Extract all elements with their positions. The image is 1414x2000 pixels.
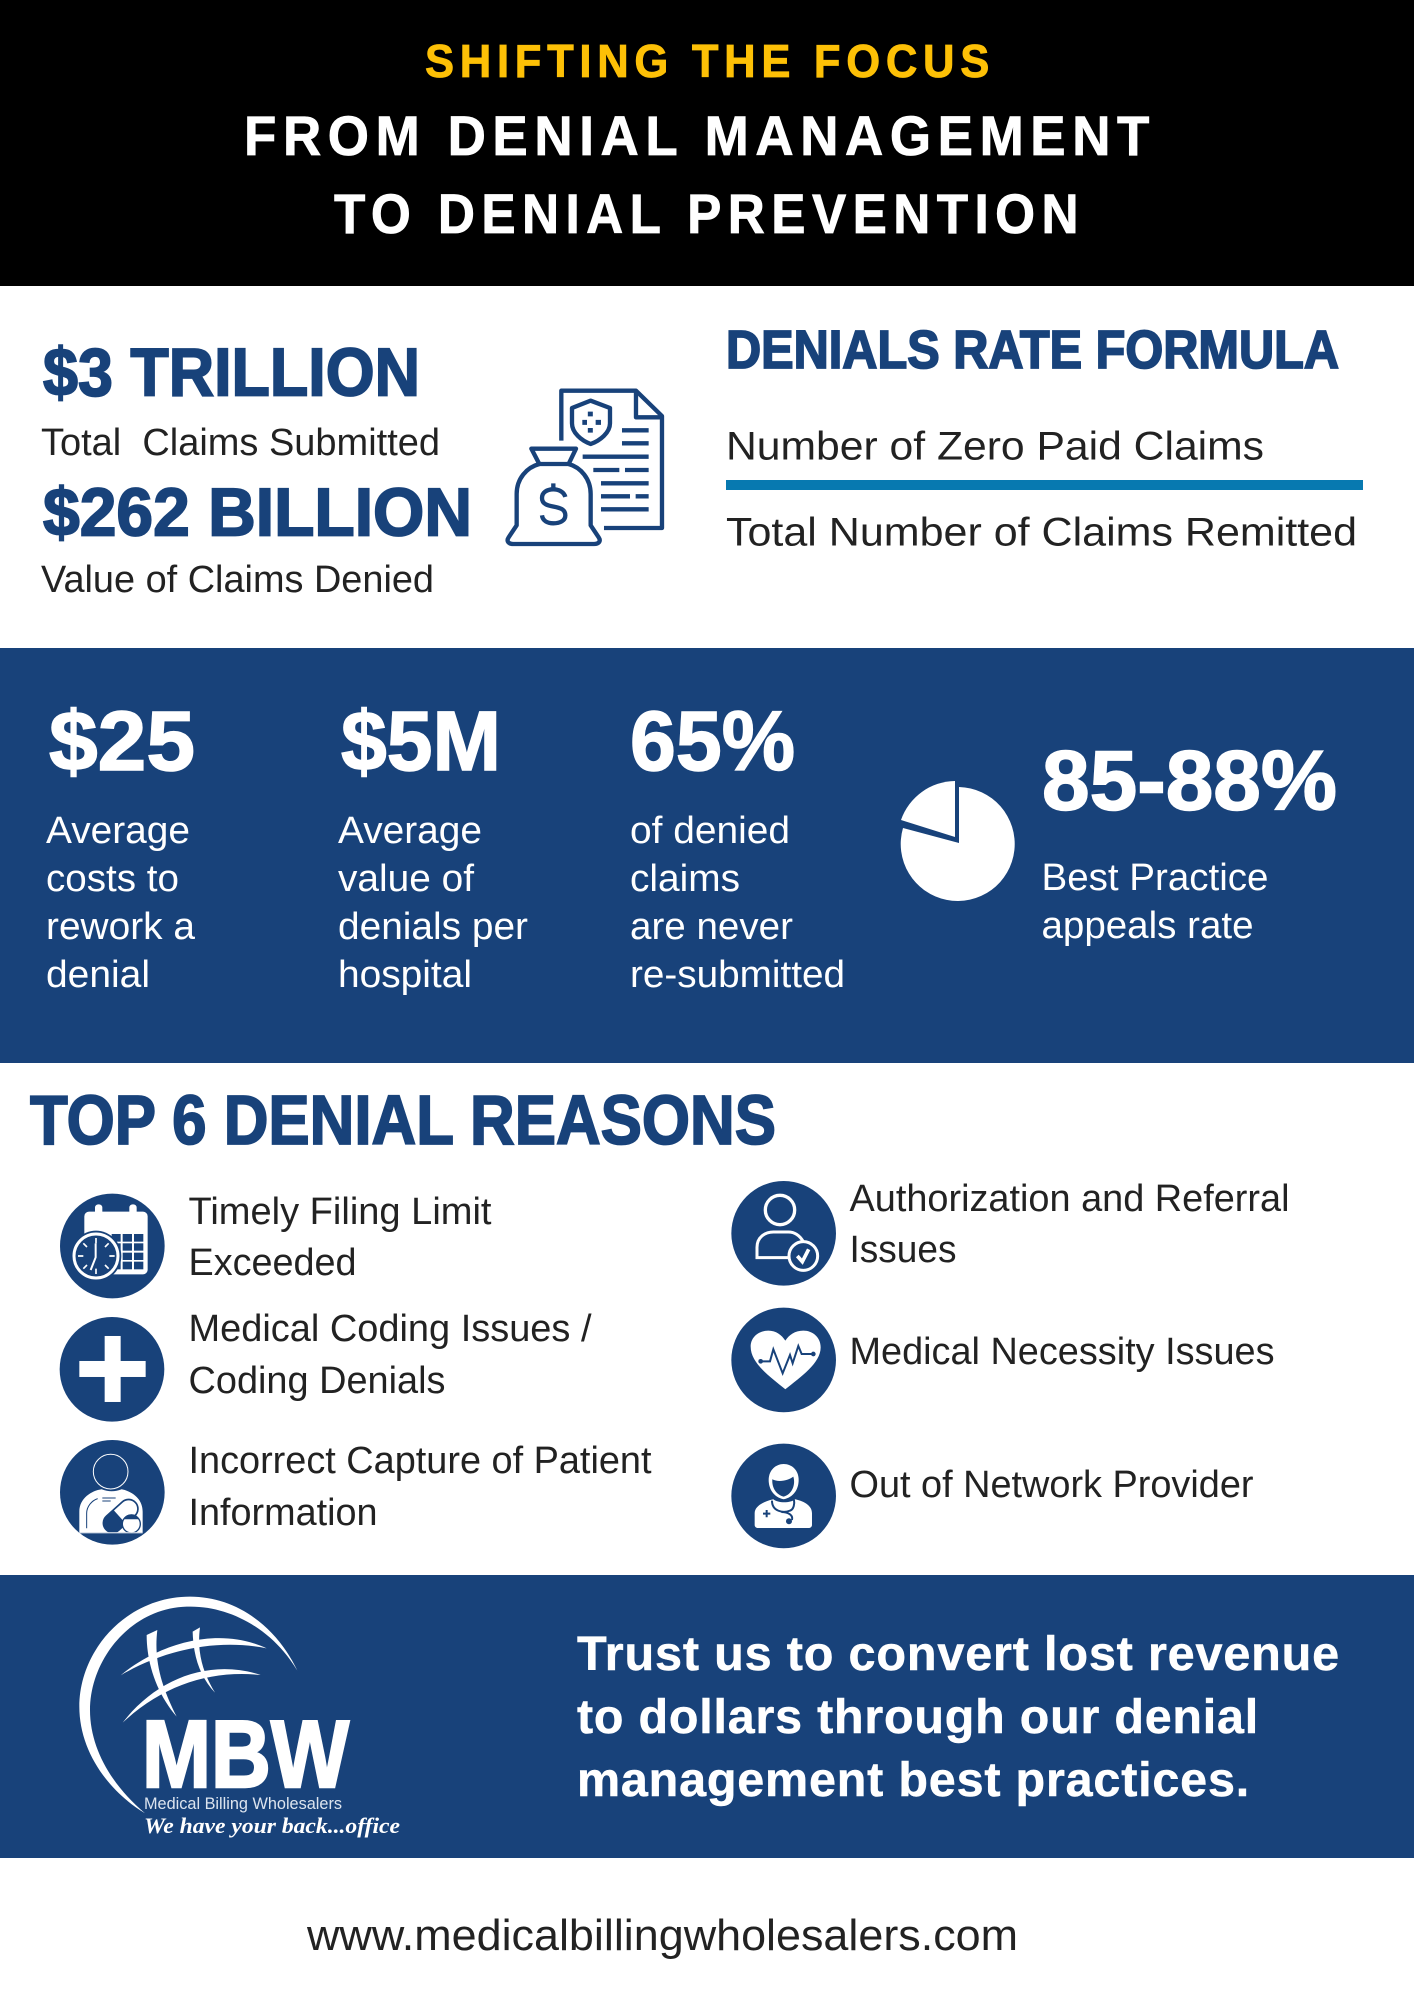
title line 2: TO DENIAL PREVENTION: [334, 182, 1085, 245]
formula heading: DENIALS RATE FORMULA: [726, 320, 1339, 380]
reason 4 text: Authorization and Referral: [850, 1178, 1290, 1220]
icon: patient with medication: [60, 1440, 165, 1545]
reason 3 text: [188, 1440, 652, 1534]
call to action text: to dollars through our denial: [577, 1690, 1259, 1744]
stat: 262 billion: $262 BILLION: [43, 474, 472, 550]
icon: medical cross: [60, 1317, 164, 1422]
reason 3 text: Incorrect Capture of Patient: [188, 1440, 652, 1482]
stat: 65 percent: re-submitted: [630, 954, 845, 996]
call to action text: Trust us to convert lost revenue: [577, 1627, 1340, 1681]
stat: 5M dollars: hospital: [338, 954, 472, 996]
panel: denial reasons right column: [731, 1178, 1290, 1548]
icon: heart with pulse: [731, 1308, 836, 1412]
stat: 3 trillion: $3 TRILLION: [43, 334, 420, 410]
stat: 65 percent: of denied: [630, 810, 790, 852]
reason 3 text: Information: [188, 1492, 378, 1534]
stat: 85-88 percent: Best Practice: [1042, 857, 1268, 899]
stat: 65 percent: 65%: [630, 694, 795, 788]
header kicker: SHIFTING THE FOCUS: [425, 35, 995, 87]
stat: 85-88 percent: [1042, 734, 1337, 947]
stat: 65 percent: claims: [630, 858, 740, 900]
call to action text: [577, 1627, 1340, 1807]
title line 1: FROM DENIAL MANAGEMENT: [244, 104, 1156, 167]
stat: 5M dollars: $5M: [341, 694, 501, 788]
stat: 25 dollars: costs to: [46, 858, 179, 900]
label: total claims submitted: Total Claims Submitted: [41, 422, 440, 464]
logo: Medical Billing Wholesalers: [79, 1597, 400, 1838]
panel: key statistics band: [0, 648, 1414, 1063]
formula numerator: Number of Zero Paid Claims: [726, 424, 1264, 468]
stat: 65 percent: are never: [630, 906, 793, 948]
panel: denial reasons left column: [60, 1191, 652, 1545]
formula denominator: Total Number of Claims Remitted: [726, 510, 1357, 554]
label: value of claims denied: Value of Claims Denied: [41, 559, 434, 601]
icon: person with check: [731, 1181, 836, 1286]
reason 4 text: Issues: [850, 1229, 956, 1271]
stat: 5M dollars: value of: [338, 858, 474, 900]
panel: denials rate formula: [726, 320, 1363, 554]
icon: money bag and claim document: [508, 391, 662, 544]
stat: 5M dollars: denials per: [338, 906, 528, 948]
reason 1 text: [188, 1191, 492, 1284]
icon: pie chart: [901, 781, 1015, 901]
reason 4 text: [850, 1178, 1290, 1271]
stat: 25 dollars: rework a: [46, 906, 196, 948]
stat: 5M dollars: [338, 694, 528, 996]
logo wordmark: MBW: [142, 1701, 349, 1808]
logo tagline: We have your back...office: [144, 1813, 400, 1838]
logo globe mark: [79, 1597, 297, 1813]
stat: 25 dollars: [46, 694, 196, 996]
stat: 85-88 percent: 85-88%: [1042, 734, 1337, 828]
reason 1 text: Exceeded: [188, 1242, 356, 1284]
reason 2 text: Coding Denials: [188, 1360, 446, 1402]
reason 2 text: Medical Coding Issues /: [188, 1308, 592, 1350]
stat: 85-88 percent: appeals rate: [1042, 905, 1254, 947]
stat: 5M dollars: Average: [338, 810, 482, 852]
icon: calendar and clock: [60, 1194, 165, 1298]
reason 1 text: Timely Filing Limit: [188, 1191, 492, 1233]
section heading: top 6 denial reasons: TOP 6 DENIAL REASONS: [30, 1081, 776, 1159]
header panel: [0, 0, 1414, 286]
panel: claims totals: [41, 334, 472, 601]
reason 2 text: [188, 1308, 592, 1402]
call to action text: management best practices.: [577, 1753, 1250, 1807]
reason 6 text: Out of Network Provider: [850, 1464, 1254, 1506]
stat: 25 dollars: Average: [46, 810, 190, 852]
reason 5 text: Medical Necessity Issues: [850, 1331, 1274, 1373]
logo company name: Medical Billing Wholesalers: [144, 1794, 342, 1813]
stat: 25 dollars: denial: [46, 954, 150, 996]
stat: 65 percent: [630, 694, 845, 996]
panel: footer call to action band: [0, 1575, 1414, 1858]
website address: www.medicalbillingwholesalers.com: [306, 1911, 1018, 1960]
icon: doctor with stethoscope: [731, 1444, 836, 1548]
stat: 25 dollars: $25: [49, 694, 195, 788]
formula divider: [726, 480, 1363, 490]
